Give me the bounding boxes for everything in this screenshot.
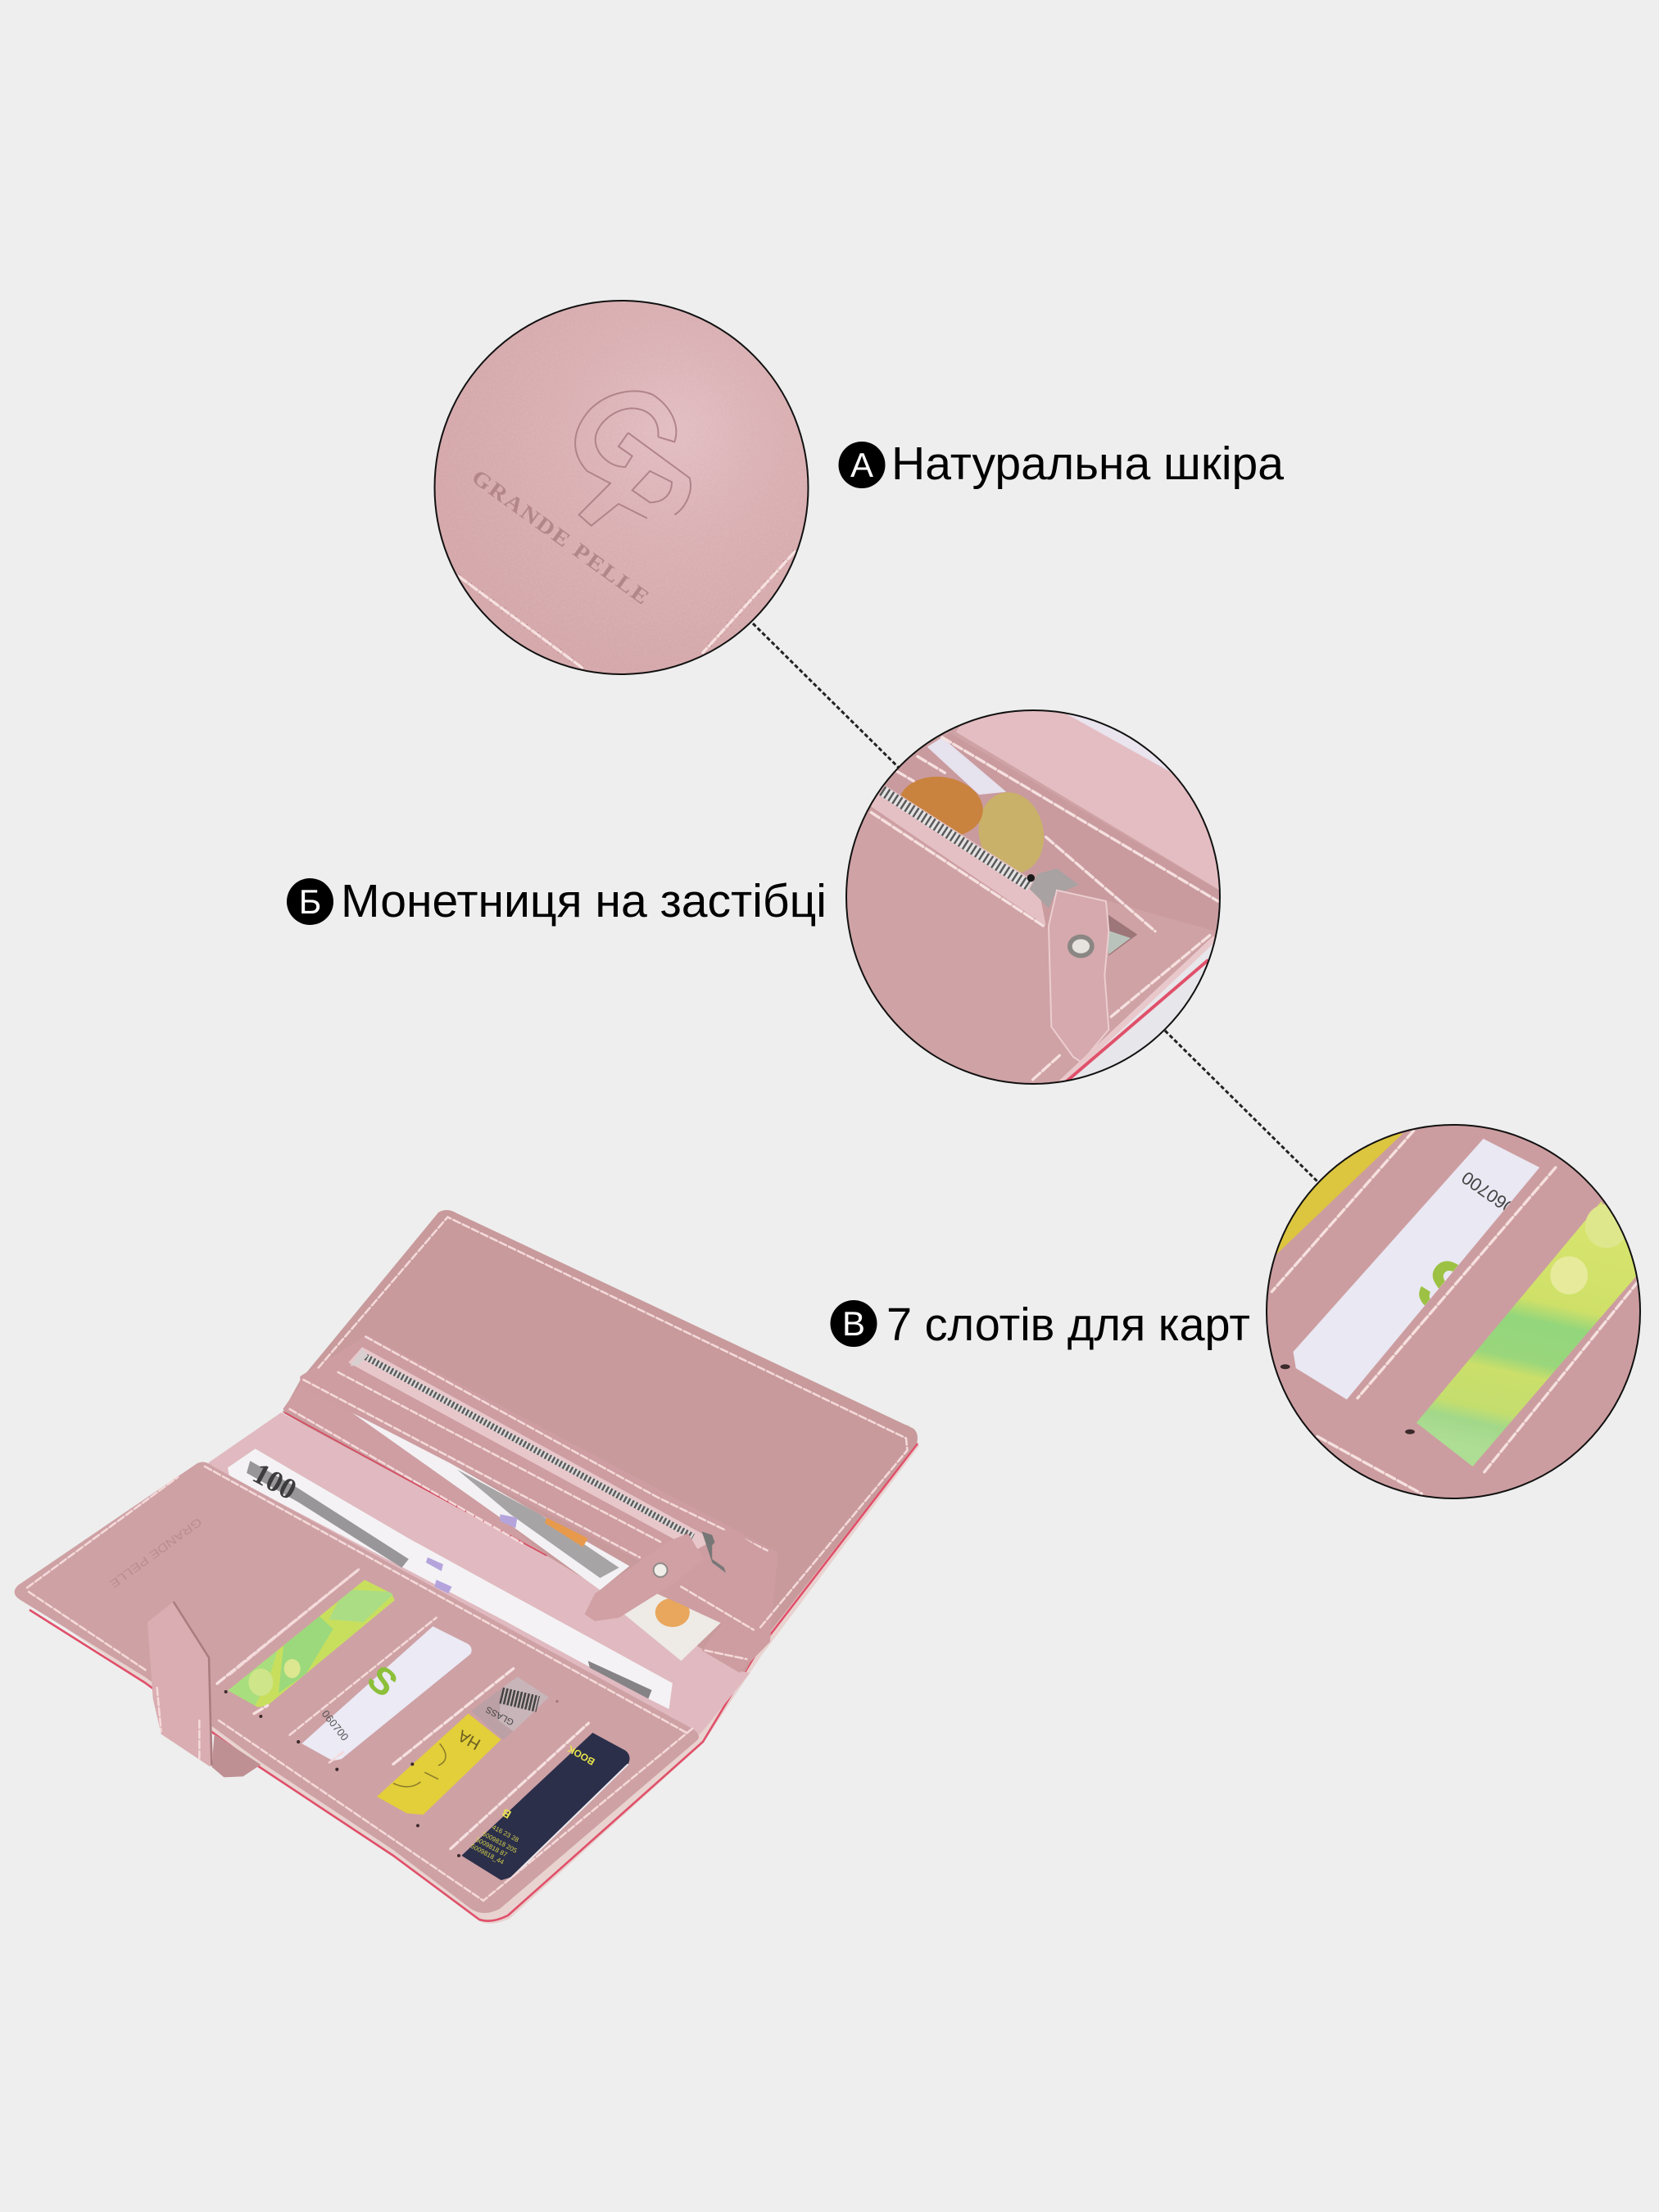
card slot 4: navy card xyxy=(451,1723,630,1880)
yellow card xyxy=(1269,1133,1403,1256)
card text: HA xyxy=(455,1725,483,1753)
label Б: coin pocket with zipper: Монетниця на застібці xyxy=(341,875,827,927)
card text: 5009818_44 xyxy=(469,1843,505,1866)
wallet interior xyxy=(209,1335,777,1734)
top leather panel xyxy=(283,1210,918,1678)
embossed GP logo xyxy=(575,392,691,526)
card text: 416 23 28 xyxy=(491,1824,520,1844)
suede lining xyxy=(956,710,1229,895)
stitching xyxy=(459,551,795,668)
card slot 1: green card xyxy=(217,1571,396,1718)
left panel stitching xyxy=(27,1466,692,1901)
label A: genuine leather: Натуральна шкіра xyxy=(891,437,1284,490)
zip pocket band xyxy=(300,1335,777,1673)
connector line: Б to В xyxy=(1165,1031,1317,1181)
stitch lines xyxy=(1271,1131,1414,1292)
banknote numeral: 100 xyxy=(247,1457,302,1506)
zipper head xyxy=(1030,868,1079,908)
white card xyxy=(1294,1139,1539,1399)
white card printing: 060700 xyxy=(1457,1167,1519,1218)
card text: BOOK xyxy=(565,1743,596,1768)
white card printing: S xyxy=(1400,1240,1493,1337)
card text: 5009818 205 xyxy=(481,1830,519,1855)
connector line: A to Б xyxy=(753,623,899,768)
badge A xyxy=(839,442,885,488)
card slot 3: yellow and barcode cards xyxy=(377,1669,559,1827)
red edge line xyxy=(29,1444,918,1921)
card slot 2: white card xyxy=(229,1570,472,1771)
fabric edge underlayer xyxy=(16,1311,919,1924)
stitches xyxy=(942,737,1218,901)
detail circle A: leather logo xyxy=(426,295,819,680)
badge В: В xyxy=(842,1304,865,1343)
embossed brand text: GRANDE PELLE xyxy=(467,465,655,610)
coins xyxy=(900,777,1044,873)
zipper teeth xyxy=(362,1355,693,1537)
card text: GLASS xyxy=(484,1704,515,1727)
product photo: open wallet xyxy=(15,1210,919,1924)
strap clasp xyxy=(147,1602,261,1777)
left leather panel xyxy=(15,1462,699,1913)
embossed brand text on panel: GRANDE PELLE xyxy=(107,1516,205,1591)
badge Б: Б xyxy=(299,882,321,921)
card text: 060700 xyxy=(320,1707,351,1743)
pull tab xyxy=(1049,891,1108,1063)
detail circle В: card slots xyxy=(1262,1118,1647,1503)
pull tab with rivet xyxy=(585,1528,777,1621)
upper banknote xyxy=(351,1412,721,1661)
zipper opening xyxy=(348,1347,714,1551)
label В: 7 card slots: 7 слотів для карт xyxy=(886,1299,1250,1351)
card text: S xyxy=(360,1657,406,1705)
zip pull xyxy=(702,1531,726,1573)
suede lining xyxy=(209,1412,750,1734)
zipper tape xyxy=(866,785,1046,926)
badge A: A xyxy=(850,446,873,484)
lower banknote xyxy=(228,1448,673,1709)
top panel stitching xyxy=(319,1217,907,1628)
slot with card xyxy=(1108,915,1137,956)
detail circle Б: zip coin pocket xyxy=(844,705,1229,1090)
outer edge xyxy=(1072,944,1213,1079)
lilac strip xyxy=(1067,714,1172,773)
badge В xyxy=(831,1300,877,1347)
zipper teeth xyxy=(882,791,1030,886)
green card xyxy=(1416,1202,1644,1466)
card text: 5009818 87 xyxy=(474,1836,509,1859)
leather strip with red line xyxy=(283,1385,546,1556)
middle band xyxy=(863,733,1223,931)
barcode xyxy=(501,1695,538,1704)
card text: B xyxy=(500,1806,513,1821)
white card printing xyxy=(1419,1172,1511,1306)
rivet xyxy=(1067,935,1095,958)
card text xyxy=(320,1657,596,1866)
badge Б xyxy=(287,878,333,925)
band stitches xyxy=(365,1337,768,1551)
